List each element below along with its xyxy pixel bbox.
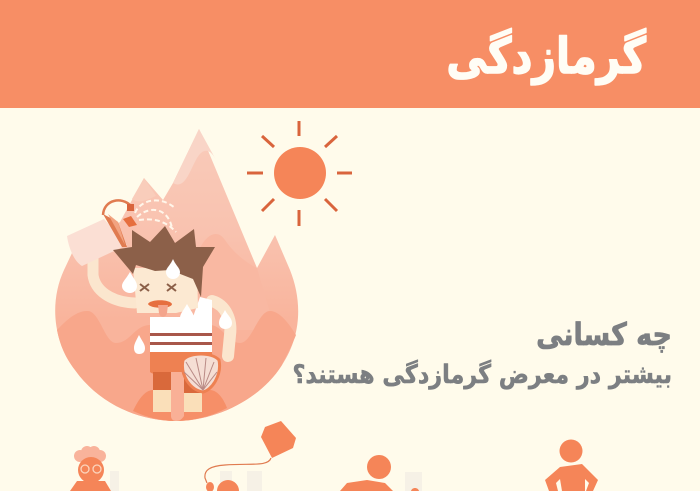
heading: who is at risk	[292, 316, 672, 389]
middle hill	[190, 234, 275, 330]
person: bent over adult	[340, 455, 422, 491]
person: standing with hands on hips	[545, 440, 598, 491]
water streams	[135, 200, 176, 252]
kite	[261, 421, 296, 458]
shorts	[150, 352, 212, 376]
person: child with kite	[205, 421, 296, 491]
hand fan	[182, 354, 220, 392]
raised arm	[93, 255, 135, 303]
cloth bucket sleeve	[67, 219, 127, 266]
eyes	[140, 284, 176, 291]
snow caps	[173, 129, 216, 184]
bottom mound	[133, 390, 227, 421]
mouth and tongue	[148, 300, 172, 317]
right arm	[212, 301, 230, 356]
flame background with mountains	[55, 129, 298, 421]
hair	[113, 226, 215, 297]
legs and socks	[153, 372, 171, 390]
lower waves	[57, 311, 296, 421]
heading: who is at risk: بیشتر در معرض گرمازدگی هستند؟	[292, 360, 672, 389]
icon: sun	[247, 121, 352, 226]
shirt	[150, 297, 212, 352]
character: overheated man pouring water	[67, 200, 232, 412]
heading: who is at risk: چه کسانی	[536, 316, 672, 354]
person: elderly	[70, 446, 119, 491]
header banner	[0, 0, 700, 108]
head	[133, 268, 198, 313]
bucket	[103, 200, 137, 247]
title: گرمازدگی	[446, 27, 647, 85]
sweat drops	[122, 259, 232, 354]
